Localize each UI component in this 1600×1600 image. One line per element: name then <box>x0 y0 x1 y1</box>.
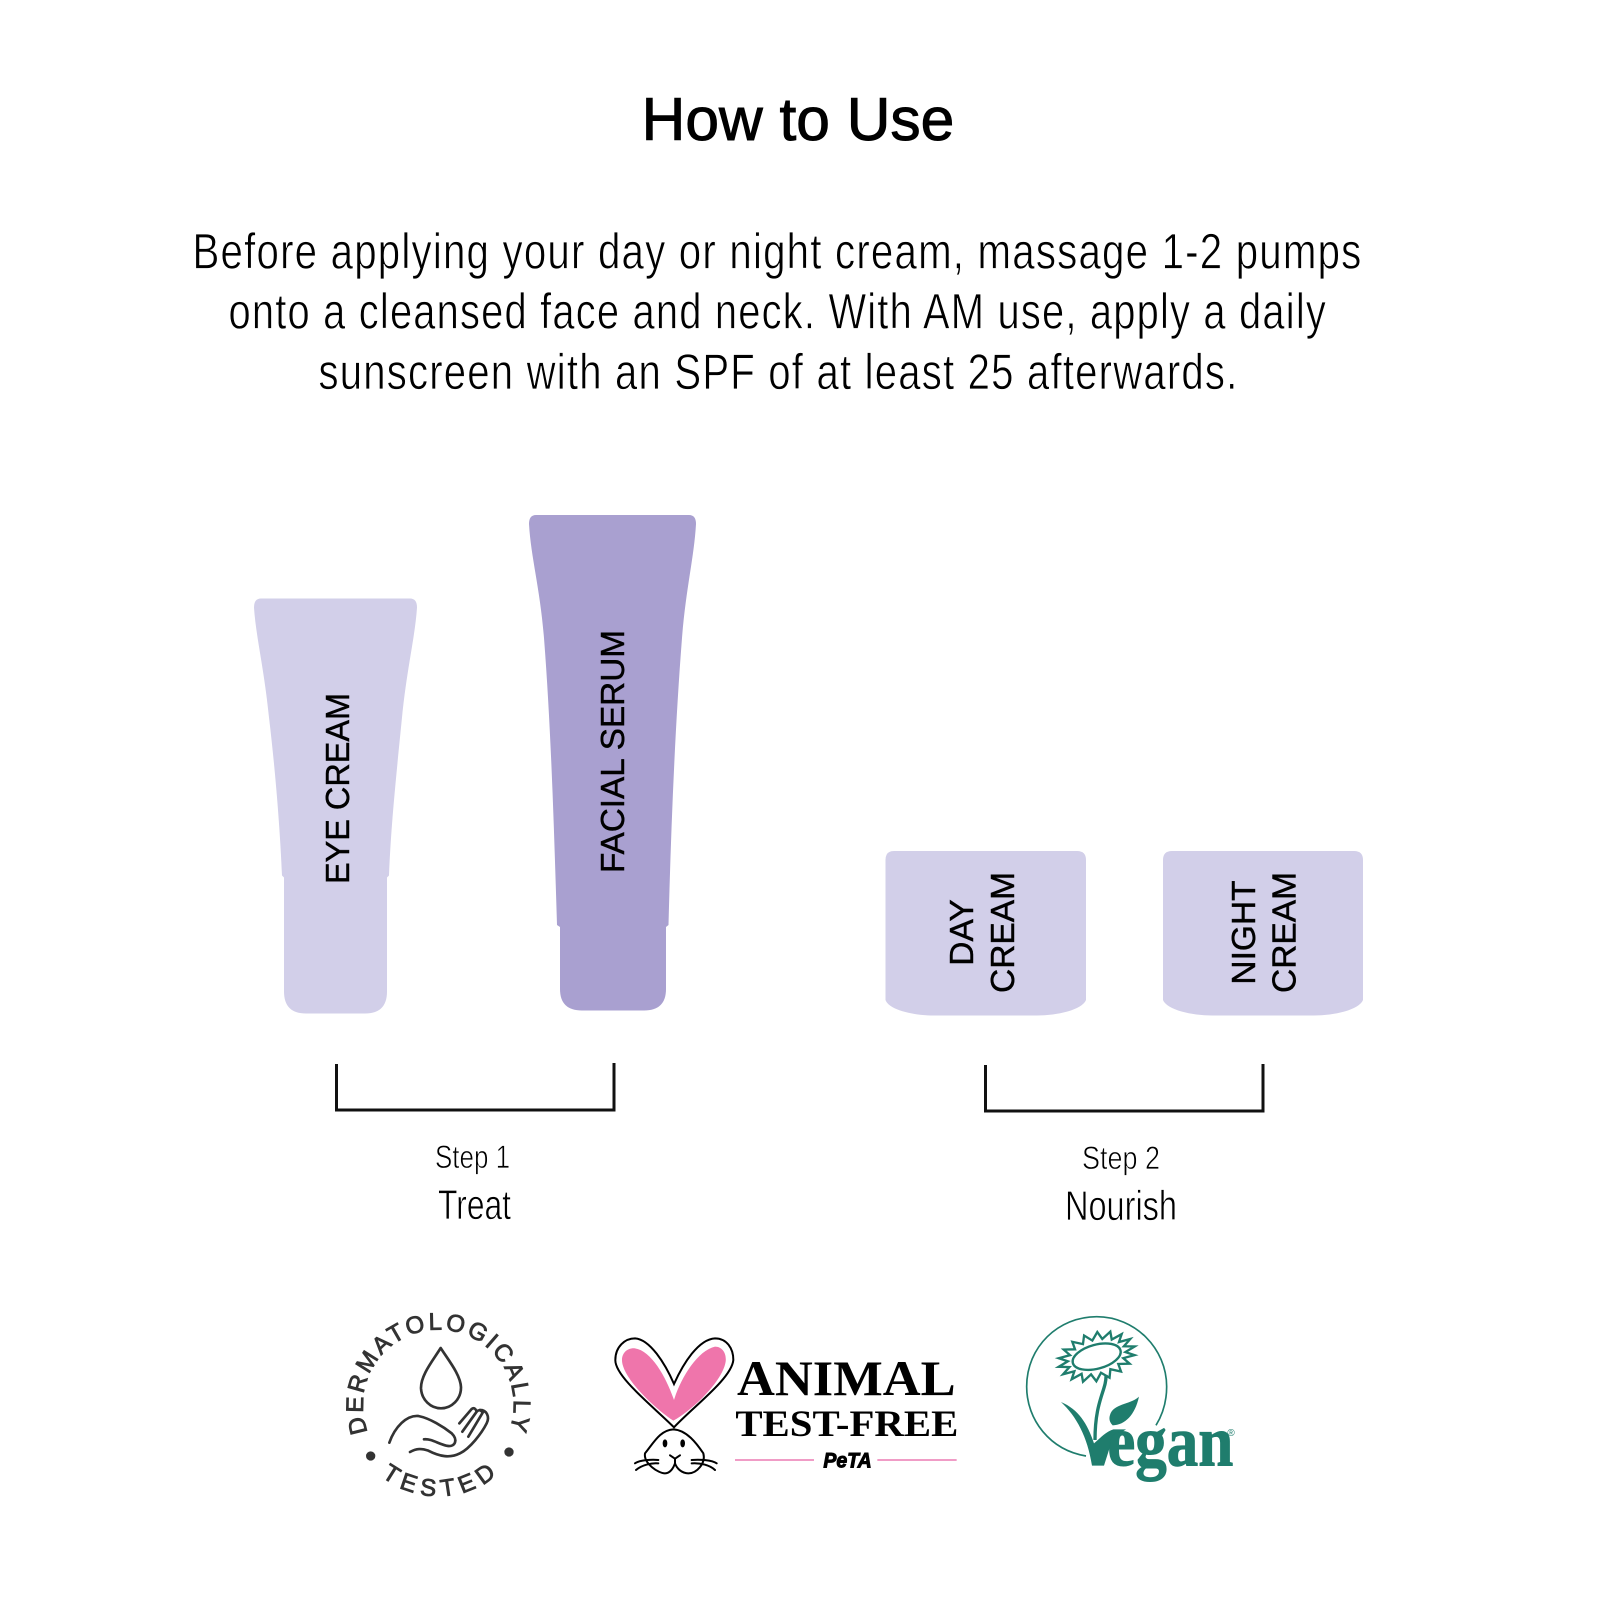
title: How to Use <box>642 85 954 153</box>
badge: animal test-free peta: PeTA <box>823 1448 872 1472</box>
icon: pink heart <box>622 1347 726 1421</box>
label: step 2 nourish: Step 2 <box>1082 1140 1160 1176</box>
badge: vegan: ® <box>1227 1428 1235 1439</box>
label: step 1 treat: Step 1 <box>435 1139 510 1175</box>
icon: bunny face <box>635 1429 717 1473</box>
icon: bunny ears heart <box>615 1338 733 1427</box>
label: step 1 treat: Treat <box>438 1181 511 1228</box>
badge: dermatologically tested: DERMATOLOGICALLY <box>346 1312 531 1435</box>
product: eye cream tube: EYE CREAM <box>319 693 356 884</box>
product: facial serum tube: FACIAL SERUM <box>594 630 631 873</box>
product: facial serum tube <box>529 515 696 1010</box>
bracket: step 2 <box>986 1064 1263 1111</box>
product: night cream jar: NIGHT <box>1226 880 1263 985</box>
text block: instructions <box>192 224 1362 400</box>
bracket: step 1 <box>336 1063 614 1110</box>
label: step 2 nourish: Nourish <box>1065 1182 1177 1229</box>
icon: circle <box>1027 1317 1167 1456</box>
product: day cream jar: CREAM <box>985 872 1022 993</box>
product: night cream jar <box>1163 851 1363 1016</box>
icon: stem and leaf <box>1095 1375 1106 1440</box>
text block: instructions: sunscreen with an SPF of at least 25 afterwards. <box>318 344 1238 400</box>
product: eye cream tube <box>254 598 417 1014</box>
product: day cream jar: DAY <box>944 899 981 966</box>
badge: vegan <box>1027 1317 1235 1482</box>
badge: animal test-free peta: TEST-FREE <box>735 1403 958 1444</box>
badge: animal test-free peta: ANIMAL <box>737 1350 956 1406</box>
product: day cream jar <box>886 851 1086 1016</box>
badge: vegan: egan <box>1107 1402 1233 1482</box>
text block: instructions: onto a cleansed face and neck. With AM use, apply a daily <box>228 284 1327 340</box>
label: step 1 treat <box>435 1139 511 1228</box>
badge: animal test-free peta <box>615 1338 958 1473</box>
badge: dermatologically tested: TESTED <box>386 1462 494 1496</box>
icon: sunflower <box>1053 1324 1141 1390</box>
label: step 2 nourish <box>1065 1140 1177 1229</box>
product: night cream jar: CREAM <box>1266 872 1304 993</box>
badge: dermatologically tested <box>346 1312 531 1496</box>
